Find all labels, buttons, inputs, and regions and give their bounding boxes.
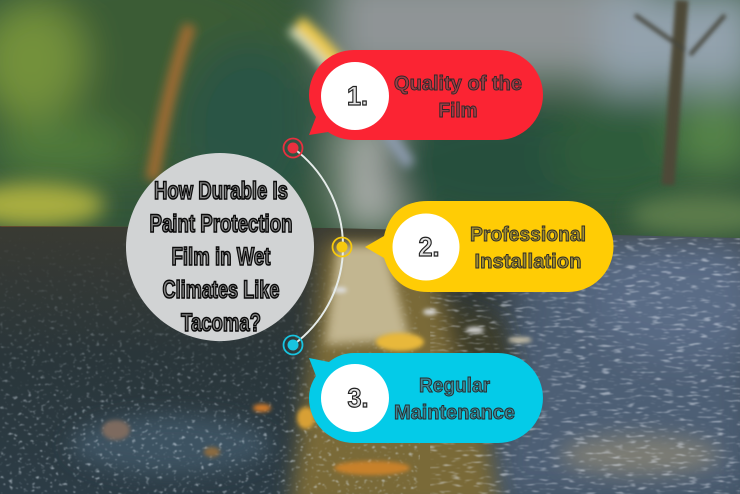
callout 3: Regular Maintenance — [309, 353, 543, 443]
callout 1: Quality of the Film: Quality of the — [394, 73, 522, 95]
callout 3: Regular Maintenance: 3. — [348, 383, 368, 413]
title: Film in Wet — [172, 243, 271, 271]
rainbow — [290, 22, 410, 165]
callout 2: Professional Installation: 2. — [418, 232, 440, 262]
title: How Durable Is — [154, 177, 288, 205]
callout 1: Quality of the Film — [309, 50, 543, 140]
callout 2: Professional Installation: Installation — [474, 251, 582, 273]
callout 3: Regular Maintenance: Maintenance — [394, 402, 515, 424]
connector arc — [293, 148, 343, 345]
central circle with title — [126, 153, 314, 341]
callout 3: Regular Maintenance: Regular — [419, 375, 490, 397]
marker: yellow dot — [332, 238, 352, 256]
marker: cyan dot — [284, 336, 302, 354]
callout 2: Professional Installation — [365, 201, 614, 292]
callout 1: Quality of the Film: 1. — [347, 81, 368, 111]
callout 2: Professional Installation: Professional — [470, 224, 586, 246]
title: Tacoma? — [181, 309, 261, 337]
title — [150, 177, 292, 337]
title: Paint Protection — [150, 210, 292, 238]
title: Climates Like — [162, 276, 280, 304]
callout 1: Quality of the Film: Film — [438, 100, 478, 122]
road — [0, 220, 740, 494]
marker: red dot — [284, 138, 302, 158]
